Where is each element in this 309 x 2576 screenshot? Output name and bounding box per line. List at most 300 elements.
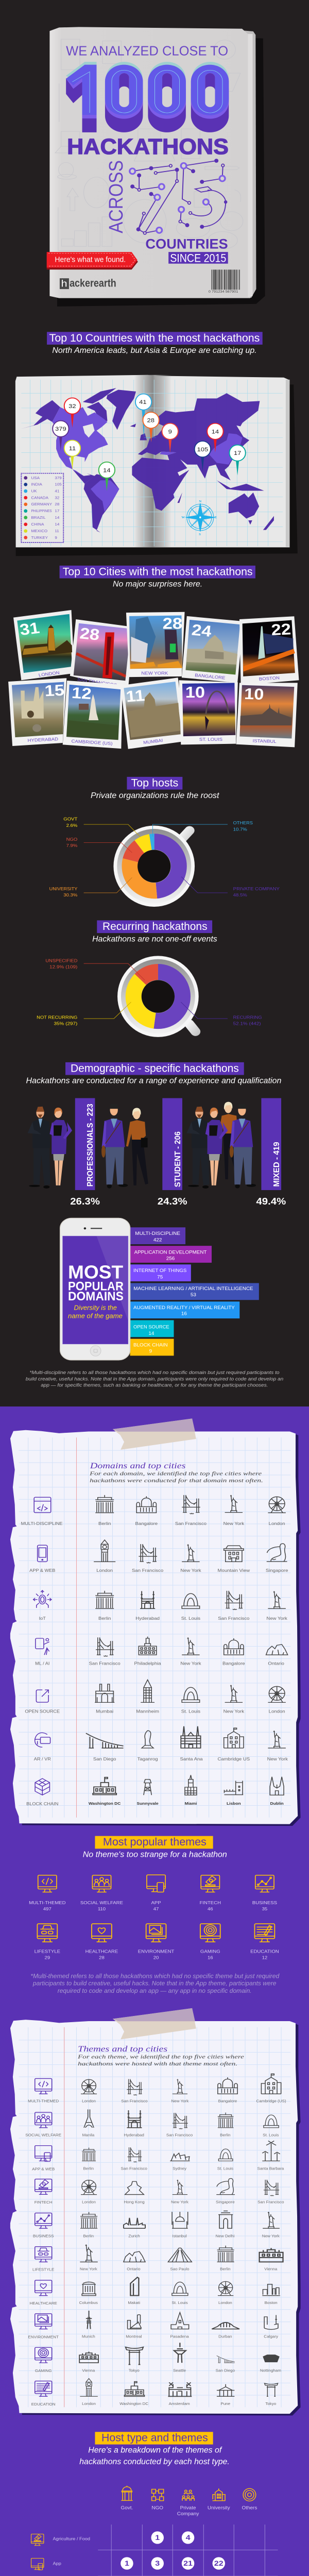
bar: mixed 419: MIXED - 419 bbox=[272, 1142, 281, 1187]
photo: New York 28: 28 bbox=[163, 615, 182, 632]
heading: hackathons: HACKATHONS bbox=[67, 134, 229, 159]
photo: Cambridge 12 bbox=[63, 681, 123, 749]
row: healthcare: Makati bbox=[128, 2301, 140, 2305]
legend: 9 bbox=[55, 535, 57, 540]
icon: compass rose bbox=[181, 500, 217, 536]
legend: BRAZIL bbox=[31, 515, 46, 520]
bar: application development bbox=[130, 1246, 212, 1263]
photo: New York 28 bbox=[126, 612, 185, 677]
row: app and web: San Francisco bbox=[121, 2166, 147, 2171]
column header: private company: Private bbox=[180, 2505, 196, 2511]
data label: unspecified bbox=[45, 958, 78, 970]
bar: multi-discipline: MULTI-DISCIPLINE bbox=[135, 1231, 180, 1236]
row: business: Istanbul bbox=[173, 2234, 187, 2238]
map pin: India 105 bbox=[195, 441, 211, 471]
row: iot: IoT bbox=[39, 1616, 46, 1621]
bar: block chain: BLOCK CHAIN bbox=[133, 1343, 168, 1347]
row: multi-themed bbox=[28, 2074, 286, 2103]
row: multi-themed: Bangalore bbox=[218, 2099, 237, 2103]
stat: 24.3%: 24.3% bbox=[158, 1196, 187, 1207]
panel: themes row one: FINTECH bbox=[200, 1901, 221, 1905]
row: ml and ai: San Francisco bbox=[89, 1661, 121, 1666]
illustration: students bbox=[101, 1104, 148, 1189]
data label: govt bbox=[63, 817, 78, 828]
photo: Boston 22 bbox=[239, 616, 299, 685]
row: environment: Montreal bbox=[126, 2334, 142, 2338]
bar: student 206 bbox=[162, 1098, 182, 1190]
map pin: Mexico 11 bbox=[64, 440, 80, 470]
footnote: multi-discipline: *Multi-discipline refers to all those hackathons which had no specific domain but just required participants to bbox=[29, 1370, 280, 1376]
row: ml and ai: New York bbox=[180, 1661, 201, 1666]
panel: themes row one: 497 bbox=[43, 1906, 52, 1911]
legend: PHILIPPINES bbox=[31, 509, 52, 513]
bar chart: most popular domains bbox=[130, 1227, 259, 1355]
row: app and web: San Francisco bbox=[132, 1568, 163, 1573]
icon group: faint doodles bbox=[55, 39, 243, 251]
row: healthcare: HEALTHCARE bbox=[29, 2301, 57, 2306]
row: multi-themed: Cambridge (US) bbox=[256, 2099, 286, 2103]
logo: hackerearth: h bbox=[61, 278, 67, 289]
photo: San Francisco 28: SAN FRANCISCO bbox=[77, 677, 117, 688]
row: multi-themed: San Francisco bbox=[121, 2099, 148, 2103]
row: app and web: St. Louis bbox=[217, 2166, 233, 2171]
bar: open source bbox=[130, 1320, 174, 1337]
data label: recurring: 52.1% (442) bbox=[233, 1021, 261, 1026]
row: ar and vr: Taganrog bbox=[138, 1756, 158, 1761]
row: ar and vr: San Diego bbox=[93, 1756, 116, 1761]
column header: university bbox=[208, 2488, 230, 2511]
row: social welfare: San Francisco bbox=[166, 2133, 193, 2138]
map pin: Canada 32: 32 bbox=[68, 403, 76, 410]
map pin: UK 41 bbox=[135, 394, 156, 437]
row: iot: Berlin bbox=[98, 1616, 111, 1621]
bar: student 206: STUDENT - 206 bbox=[173, 1131, 182, 1187]
subheading: diversity is the name of the game: name of the game bbox=[68, 1312, 123, 1319]
heading: top 10 countries: Top 10 Countries with the most hackathons bbox=[49, 332, 260, 344]
row: social welfare: Berlin bbox=[220, 2133, 231, 2138]
panel: themes row two bbox=[35, 1924, 279, 1960]
heading: themes and top cities: Themes and top cities bbox=[78, 2044, 168, 2054]
subheading: private organizations: Private organizations rule the roost bbox=[91, 791, 220, 800]
heading: domains and top cities: Domains and top cities bbox=[90, 1461, 186, 1470]
row: healthcare: London bbox=[218, 2301, 232, 2305]
map pin: UK 41: 41 bbox=[139, 399, 147, 405]
map pin: China 14: 14 bbox=[212, 428, 219, 435]
data label: university: UNIVERSITY bbox=[49, 886, 77, 891]
map pin: Canada 32 bbox=[64, 398, 80, 428]
icon: cup handle bbox=[182, 831, 190, 838]
photo: Cambridge 12: CAMBRIDGE (US) bbox=[71, 739, 113, 746]
data label: not recurring bbox=[37, 1015, 77, 1026]
subheading: breakdown of themes: Here's a breakdown of the themes of bbox=[88, 2445, 222, 2454]
photo: Hyderabad 15: 15 bbox=[44, 681, 65, 700]
row: iot: New York bbox=[266, 1616, 287, 1621]
subheading: not one-off events: Hackathons are not one-off events bbox=[92, 934, 217, 943]
photo: Boston 22: 22 bbox=[271, 620, 291, 639]
bar: multi-discipline bbox=[130, 1227, 185, 1244]
row: block chain: BLOCK CHAIN bbox=[26, 1802, 58, 1806]
row: multi-themed: MULTI-THEMED bbox=[28, 2099, 59, 2103]
row: social welfare: SOCIAL WELFARE bbox=[25, 2133, 61, 2138]
footnote: multi-discipline: app — for specific themes, such as banking or healthcare, or for any theme the participant chooses. bbox=[41, 1383, 268, 1388]
column header: ngo: NGO bbox=[151, 2505, 163, 2511]
barcode bbox=[209, 280, 240, 294]
row: ar and vr: Santa Ana bbox=[180, 1756, 203, 1761]
row: iot: San Francisco bbox=[218, 1616, 249, 1621]
row: fintech: New York bbox=[171, 2200, 188, 2204]
photo: San Francisco 28 bbox=[70, 619, 134, 689]
icon: compass rose: W bbox=[181, 516, 185, 519]
row: app and web: New York bbox=[180, 1568, 201, 1573]
row: social welfare: Manila bbox=[82, 2133, 95, 2138]
legend: 11 bbox=[55, 529, 59, 533]
photo: Mumbai 11: 11 bbox=[125, 687, 146, 705]
row: multi-discipline: MULTI-DISCIPLINE bbox=[21, 1521, 63, 1526]
map pin: Turkey 9: 9 bbox=[168, 428, 172, 435]
map pin: Germany 28: 28 bbox=[147, 417, 154, 423]
row: lifestyle bbox=[32, 2245, 283, 2272]
photo: London 31: LONDON bbox=[38, 670, 60, 677]
row: social welfare bbox=[25, 2109, 279, 2138]
row: environment bbox=[28, 2311, 278, 2339]
map pin: USA 379 bbox=[53, 421, 69, 451]
ribbon: here's what we found: Here's what we found. bbox=[55, 256, 126, 264]
row: app: 22 bbox=[214, 2560, 224, 2568]
logo: hackerearth: ackerearth bbox=[70, 277, 116, 289]
row: multi-discipline bbox=[21, 1495, 286, 1526]
row: app: 21 bbox=[183, 2560, 193, 2568]
row: open source: Mumbai bbox=[96, 1709, 113, 1714]
bar: internet of things: 75 bbox=[157, 1275, 163, 1279]
bar: multi-discipline: 422 bbox=[153, 1238, 162, 1243]
map pin: Brazil 14: 14 bbox=[103, 467, 111, 473]
row: app: 3 bbox=[155, 2560, 160, 2568]
row: block chain: Washington DC bbox=[89, 1801, 121, 1806]
column header: private company bbox=[177, 2490, 199, 2516]
footnote: multi-themed bbox=[30, 1972, 280, 1994]
data label: recurring bbox=[233, 1015, 262, 1026]
legend: 105 bbox=[55, 482, 62, 487]
legend: 14 bbox=[55, 515, 59, 520]
text: description bbox=[89, 1471, 263, 1484]
column header: govt: Govt. bbox=[121, 2505, 133, 2511]
footnote: multi-themed: required to code and develop an app — any app in no specific domain. bbox=[58, 1987, 252, 1994]
column header: others: Others bbox=[242, 2505, 258, 2511]
row: education: Washington DC bbox=[119, 2402, 149, 2406]
text: description bbox=[77, 2054, 244, 2067]
photo: Cambridge 12: 12 bbox=[71, 684, 92, 703]
row: education: Tokyo bbox=[265, 2402, 276, 2406]
photo: Istanbul 10 bbox=[236, 683, 298, 747]
row: iot: Hyderabad bbox=[135, 1616, 160, 1621]
row: education: EDUCATION bbox=[31, 2402, 56, 2406]
panel: themes row one: 35 bbox=[262, 1906, 267, 1911]
panel: themes row one: MULTI-THEMED bbox=[29, 1901, 66, 1905]
panel: themes row one: 46 bbox=[208, 1906, 213, 1911]
row: agriculture / food bbox=[31, 2531, 194, 2546]
row: lifestyle: Sao Paulo bbox=[170, 2267, 190, 2272]
text: description: For each theme, we identified the top five cities where bbox=[77, 2054, 244, 2060]
photo: Istanbul 10: 10 bbox=[244, 685, 264, 703]
illustration: smartphone with title bbox=[60, 1218, 130, 1360]
row: multi-discipline: Bangalore bbox=[135, 1521, 158, 1526]
heading: most popular domains: MOST bbox=[68, 1262, 123, 1283]
heading: top 10 cities: Top 10 Cities with the most hackathons bbox=[63, 566, 253, 578]
column header: university: University bbox=[208, 2505, 230, 2511]
footnote: multi-discipline bbox=[26, 1370, 283, 1388]
row: healthcare: Columbus bbox=[79, 2301, 98, 2305]
stat: 26.3%: 26.3% bbox=[70, 1196, 100, 1207]
row: business: Zurich bbox=[128, 2234, 140, 2238]
heading: demographic-specific: Demographic - specific hackathons bbox=[71, 1062, 239, 1074]
map pin: China 14 bbox=[207, 423, 224, 452]
map pin: Brazil 14 bbox=[99, 462, 115, 491]
legend: 14 bbox=[55, 522, 59, 527]
row: app: 1 bbox=[125, 2560, 129, 2568]
heading: most popular domains bbox=[68, 1262, 124, 1303]
row: open source: OPEN SOURCE bbox=[25, 1709, 60, 1714]
data label: others: 10.7% bbox=[233, 827, 247, 832]
legend: MEXICO bbox=[31, 529, 47, 533]
panel: themes row two: 12 bbox=[262, 1955, 267, 1960]
row: healthcare: Boston bbox=[265, 2301, 278, 2305]
row: gaming: Tokyo bbox=[129, 2368, 140, 2372]
row: gaming: Nottingham bbox=[260, 2368, 281, 2372]
map pin: Mexico 11: 11 bbox=[69, 445, 76, 452]
legend bbox=[21, 473, 63, 543]
panel: themes row one: 110 bbox=[98, 1906, 106, 1911]
data label: govt: GOVT bbox=[63, 817, 78, 822]
subheading: north america leads: North America leads, but Asia & Europe are catching up. bbox=[52, 346, 257, 355]
row: business: New York bbox=[262, 2234, 280, 2238]
row: multi-themed: New York bbox=[171, 2099, 189, 2103]
row: iot: St. Louis bbox=[181, 1616, 201, 1621]
subheading: breakdown of themes bbox=[79, 2445, 230, 2466]
legend: TURKEY bbox=[31, 535, 48, 540]
photo: St. Louis 10 bbox=[179, 680, 238, 744]
footnote: multi-discipline: build creative, useful hacks. Note that in the App domain, participants were only required to code and develop an bbox=[26, 1377, 283, 1382]
row: app and web: Mountain View bbox=[218, 1568, 250, 1573]
row: ar and vr bbox=[34, 1726, 288, 1761]
barcode: 0 791234 567901 bbox=[209, 290, 238, 294]
row: multi-discipline: New York bbox=[224, 1521, 245, 1526]
panel: notebook page, domains and top cities bbox=[10, 1418, 301, 1826]
footnote: multi-themed: participants to build creative, useful hacks. Note that in the App theme, participants were bbox=[32, 1979, 276, 1987]
panel: themes row one: 47 bbox=[153, 1906, 159, 1911]
number: 75 drawn as circuit traces bbox=[130, 159, 227, 234]
row: gaming: GAMING bbox=[35, 2368, 52, 2373]
heading: host type and themes: Host type and themes bbox=[101, 2432, 208, 2444]
photo: Boston 22: BOSTON bbox=[259, 675, 280, 682]
map pin: Philippines 17: 17 bbox=[234, 450, 242, 456]
panel: themes row two: 28 bbox=[99, 1955, 105, 1960]
panel: themes row one: APP bbox=[151, 1901, 161, 1905]
row: business bbox=[33, 2211, 280, 2238]
panel: themes row two: EDUCATION bbox=[250, 1949, 279, 1954]
big number: 1000 bbox=[66, 62, 229, 132]
logo: hackerearth bbox=[60, 277, 116, 289]
bar: application development: 256 bbox=[166, 1256, 175, 1261]
chart: host type and themes table bbox=[31, 2486, 278, 2576]
row: environment: Pasadena bbox=[170, 2334, 190, 2338]
row: healthcare bbox=[29, 2277, 280, 2306]
row: open source: St. Louis bbox=[181, 1709, 201, 1714]
row: iot bbox=[33, 1590, 287, 1621]
row: open source: New York bbox=[224, 1709, 245, 1714]
row: ml and ai bbox=[35, 1637, 288, 1666]
row: ml and ai: Bangalore bbox=[222, 1661, 245, 1666]
row: open source: London bbox=[269, 1709, 285, 1714]
row: gaming: Seattle bbox=[173, 2368, 186, 2372]
photo: San Francisco 28: 28 bbox=[79, 624, 100, 643]
bar: mixed 419 bbox=[261, 1098, 281, 1190]
data label: university: 30.3% bbox=[63, 893, 77, 897]
data label: unspecified: UNSPECIFIED bbox=[45, 958, 78, 963]
map pin: USA 379: 379 bbox=[55, 426, 66, 432]
data label: university bbox=[49, 886, 77, 897]
photo: Mumbai 11: MUMBAI bbox=[143, 738, 163, 745]
row: social welfare: Hyderabad bbox=[124, 2133, 144, 2138]
legend: INDIA bbox=[31, 482, 43, 487]
text: description: hackathons were hosted with that theme most often. bbox=[78, 2061, 237, 2067]
panel: themes row one: BUSINESS bbox=[252, 1901, 277, 1905]
row: lifestyle: Ontario bbox=[127, 2267, 141, 2272]
heading: across (vertical): ACROSS bbox=[105, 160, 127, 233]
heading: countries: COUNTRIES bbox=[145, 236, 228, 252]
row: app bbox=[31, 2557, 225, 2570]
heading: most popular domains: DOMAINS bbox=[68, 1289, 124, 1303]
illustration: mixed group bbox=[186, 1102, 256, 1189]
map pin: Philippines 17 bbox=[229, 445, 246, 476]
row: ml and ai: Philadelphia bbox=[134, 1661, 162, 1666]
row: app and web: Singapore bbox=[266, 1568, 288, 1573]
heading: most popular themes: Most popular themes bbox=[103, 1836, 207, 1848]
panel: themes row two: GAMING bbox=[200, 1949, 220, 1954]
row: education: Amsterdam bbox=[169, 2402, 190, 2406]
photo: London 31 bbox=[13, 610, 75, 680]
bar: open source: OPEN SOURCE bbox=[133, 1325, 169, 1330]
bar: internet of things: INTERNET OF THINGS bbox=[133, 1268, 186, 1273]
row: ml and ai: Ontario bbox=[268, 1661, 284, 1666]
panel: notebook page, themes and top cities bbox=[10, 2008, 301, 2416]
heading: top hosts: Top hosts bbox=[131, 777, 178, 789]
legend: CANADA bbox=[31, 496, 49, 500]
ribbon: here's what we found bbox=[47, 252, 138, 269]
row: app and web: Berlin bbox=[83, 2166, 94, 2171]
photo: St. Louis 10: ST. LOUIS bbox=[199, 737, 222, 742]
footnote: multi-themed: *Multi-themed refers to all those hackathons which had no specific theme but just required bbox=[30, 1972, 280, 1979]
row: lifestyle: LIFESTYLE bbox=[32, 2267, 54, 2272]
row: education: London bbox=[82, 2402, 96, 2406]
data label: others bbox=[233, 821, 253, 832]
legend: 17 bbox=[55, 509, 59, 513]
panel: themes row two: HEALTHCARE bbox=[85, 1949, 118, 1954]
row: agriculture / food: 1 bbox=[155, 2534, 160, 2542]
row: app and web bbox=[29, 1540, 288, 1573]
row: fintech: London bbox=[82, 2200, 96, 2204]
heading: we analyzed close to: WE ANALYZED CLOSE TO bbox=[66, 43, 228, 58]
row: open source: Mannheim bbox=[136, 1709, 159, 1714]
map pin: India 105: 105 bbox=[197, 446, 208, 453]
bar: ar and vr bbox=[130, 1301, 239, 1318]
row: environment: Calgary bbox=[264, 2334, 278, 2338]
row: fintech bbox=[35, 2178, 284, 2205]
subheading: no theme's too strange: No theme's too strange for a hackathon bbox=[83, 1850, 227, 1859]
legend: USA bbox=[31, 476, 40, 480]
subheading: breakdown of themes: hackathons conducted by each host type. bbox=[79, 2457, 230, 2466]
row: education: Pune bbox=[220, 2402, 230, 2406]
legend: 41 bbox=[55, 489, 59, 493]
panel: themes row two: 16 bbox=[208, 1955, 213, 1960]
row: block chain: Miami bbox=[184, 1801, 197, 1806]
text: description: For each domain, we identified the top five cities where bbox=[89, 1471, 262, 1477]
row: agriculture / food: Agriculture / Food bbox=[53, 2536, 90, 2541]
row: fintech: Singapore bbox=[216, 2200, 235, 2204]
data label: govt: 2.6% bbox=[66, 823, 77, 828]
row: environment: ENVIRONMENT bbox=[28, 2335, 59, 2339]
photo: Hyderabad 15: HYDERABAD bbox=[27, 737, 59, 743]
data label: private company bbox=[233, 886, 280, 897]
page background: dark upper section bbox=[0, 0, 309, 1406]
row: business: New Delhi bbox=[216, 2234, 235, 2238]
panel: themes row one: SOCIAL WELFARE bbox=[80, 1901, 123, 1905]
photo: Istanbul 10: ISTANBUL bbox=[252, 738, 277, 744]
panel: themes row two: 29 bbox=[45, 1955, 50, 1960]
row: block chain: Lisbon bbox=[227, 1801, 241, 1806]
legend: 32 bbox=[55, 496, 59, 500]
text: description: hackathons were conducted for that domain most often. bbox=[90, 1478, 263, 1484]
subheading: diversity is the name of the game bbox=[68, 1304, 123, 1319]
legend: UK bbox=[31, 489, 37, 493]
chart: top hosts coffee cup donut bbox=[49, 817, 280, 907]
data label: ngo: NGO bbox=[66, 837, 77, 842]
row: fintech: Hong Kong bbox=[124, 2200, 145, 2204]
icon: compass rose: E bbox=[215, 516, 217, 519]
photo: St. Louis 10: 10 bbox=[185, 684, 205, 701]
row: app and web: APP & WEB bbox=[29, 1568, 56, 1573]
data label: private company: 48.5% bbox=[233, 893, 247, 897]
row: gaming: San Diego bbox=[216, 2368, 235, 2372]
bar: ml and ai: 53 bbox=[191, 1293, 196, 1297]
row: education bbox=[31, 2379, 278, 2406]
data label: unspecified: 12.9% (109) bbox=[49, 964, 77, 970]
bar: block chain: 9 bbox=[149, 1349, 152, 1354]
stat: 49.4%: 49.4% bbox=[256, 1196, 286, 1207]
data label: others: OTHERS bbox=[233, 821, 253, 825]
row: multi-discipline: London bbox=[269, 1521, 285, 1526]
panel: city polaroids bbox=[8, 610, 299, 749]
panel: themes row two: LIFESTYLE bbox=[35, 1949, 60, 1954]
row: gaming bbox=[35, 2343, 281, 2373]
row: multi-discipline: Berlin bbox=[98, 1521, 111, 1526]
illustration: professionals bbox=[28, 1107, 72, 1189]
subheading: diversity is the name of the game: Diversity is the bbox=[74, 1304, 117, 1311]
heading: most popular domains: POPULAR bbox=[68, 1279, 124, 1293]
page background: purple lower section bbox=[0, 1406, 309, 2576]
row: ar and vr: Cambridge US bbox=[217, 1756, 250, 1761]
data label: ngo: 7.9% bbox=[66, 843, 77, 848]
row: gaming: Vienna bbox=[82, 2368, 95, 2372]
data label: not recurring: NOT RECURRING bbox=[37, 1015, 77, 1020]
row: multi-themed: London bbox=[82, 2099, 96, 2103]
column header: govt bbox=[121, 2486, 133, 2511]
bar: ml and ai: MACHINE LEARNING / ARTIFICIAL INTELLIGENCE bbox=[133, 1286, 253, 1291]
row: agriculture / food: 4 bbox=[186, 2534, 191, 2542]
chart: recurring coffee cup donut bbox=[37, 956, 262, 1037]
row: ml and ai: ML / AI bbox=[35, 1661, 49, 1666]
data label: private company: PRIVATE COMPANY bbox=[233, 886, 280, 891]
row: app and web: APP & WEB bbox=[32, 2167, 55, 2171]
